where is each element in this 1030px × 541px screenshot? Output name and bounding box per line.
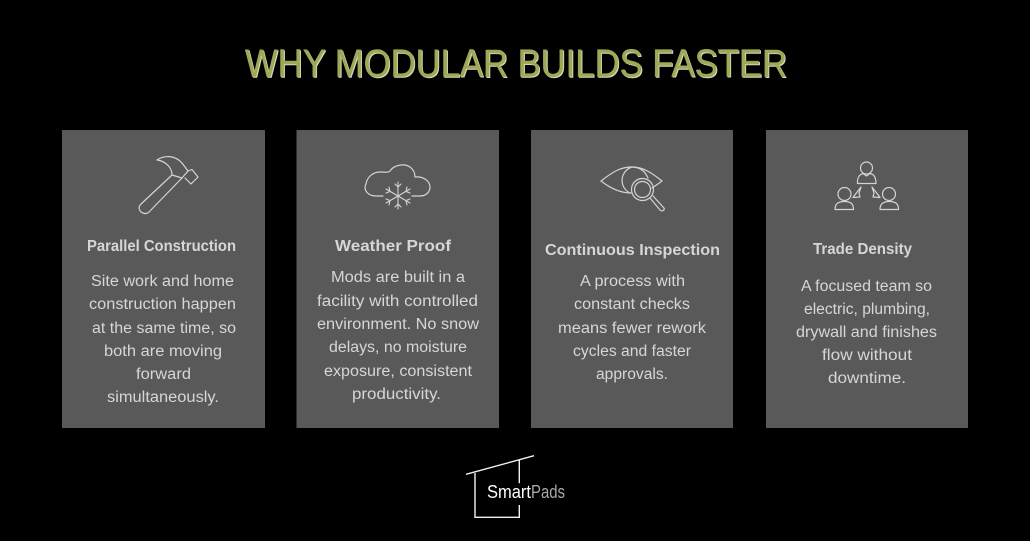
text: continuous inspection body: cycles and faster [573, 343, 691, 360]
title: WHY MODULAR BUILDS FASTER [245, 42, 787, 86]
heading: continuous inspection: Continuous Inspection [545, 242, 720, 259]
icon: hammer [139, 157, 198, 214]
heading: trade density: Trade Density [813, 241, 912, 258]
logo wordmark [487, 482, 565, 502]
text: continuous inspection body: constant checks [574, 296, 690, 313]
text: weather proof body: productivity. [352, 386, 441, 403]
text: weather proof body: exposure, consistent [324, 363, 473, 380]
icon: cloud with snowflake [365, 165, 430, 209]
text: parallel construction body: both are moving [104, 343, 222, 360]
text: weather proof body: Mods are built in a [331, 269, 465, 286]
text: parallel construction body: construction happen [89, 296, 236, 313]
text: continuous inspection body: means fewer rework [558, 320, 706, 337]
text: weather proof body [317, 269, 480, 403]
text: weather proof body: facility with controlled [317, 293, 478, 310]
logo wordmark: Smart [487, 482, 531, 502]
text: continuous inspection body [558, 273, 706, 383]
logo wordmark: Pads [531, 482, 565, 502]
panel: trade density [766, 130, 968, 428]
panel: parallel construction [62, 130, 265, 428]
text: trade density body: drywall and finishes [796, 324, 937, 341]
text: parallel construction body: forward [136, 366, 191, 383]
text: trade density body: A focused team so [801, 278, 932, 295]
text: parallel construction body: Site work and home [91, 273, 234, 290]
text: continuous inspection body: A process with [580, 273, 685, 290]
icon: house outline [466, 456, 534, 517]
heading: weather proof: Weather Proof [335, 238, 452, 255]
text: trade density body: flow without [822, 347, 913, 364]
text: continuous inspection body: approvals. [596, 366, 668, 383]
text: weather proof body: environment. No snow [317, 316, 480, 333]
text: trade density body [796, 278, 937, 387]
text: trade density body: electric, plumbing, [804, 301, 930, 318]
text: parallel construction body: at the same time, so [92, 320, 236, 337]
panel: weather proof [296, 130, 499, 428]
icon: three people with arrows [835, 162, 898, 210]
heading: parallel construction: Parallel Construction [87, 238, 236, 255]
panel: continuous inspection [531, 130, 733, 428]
text: parallel construction body [89, 273, 236, 406]
logo: SmartPads [466, 456, 565, 517]
text: trade density body: downtime. [828, 370, 906, 387]
text: weather proof body: delays, no moisture [329, 339, 467, 356]
text: parallel construction body: simultaneously. [107, 389, 219, 406]
icon: eye with magnifier [601, 167, 664, 211]
